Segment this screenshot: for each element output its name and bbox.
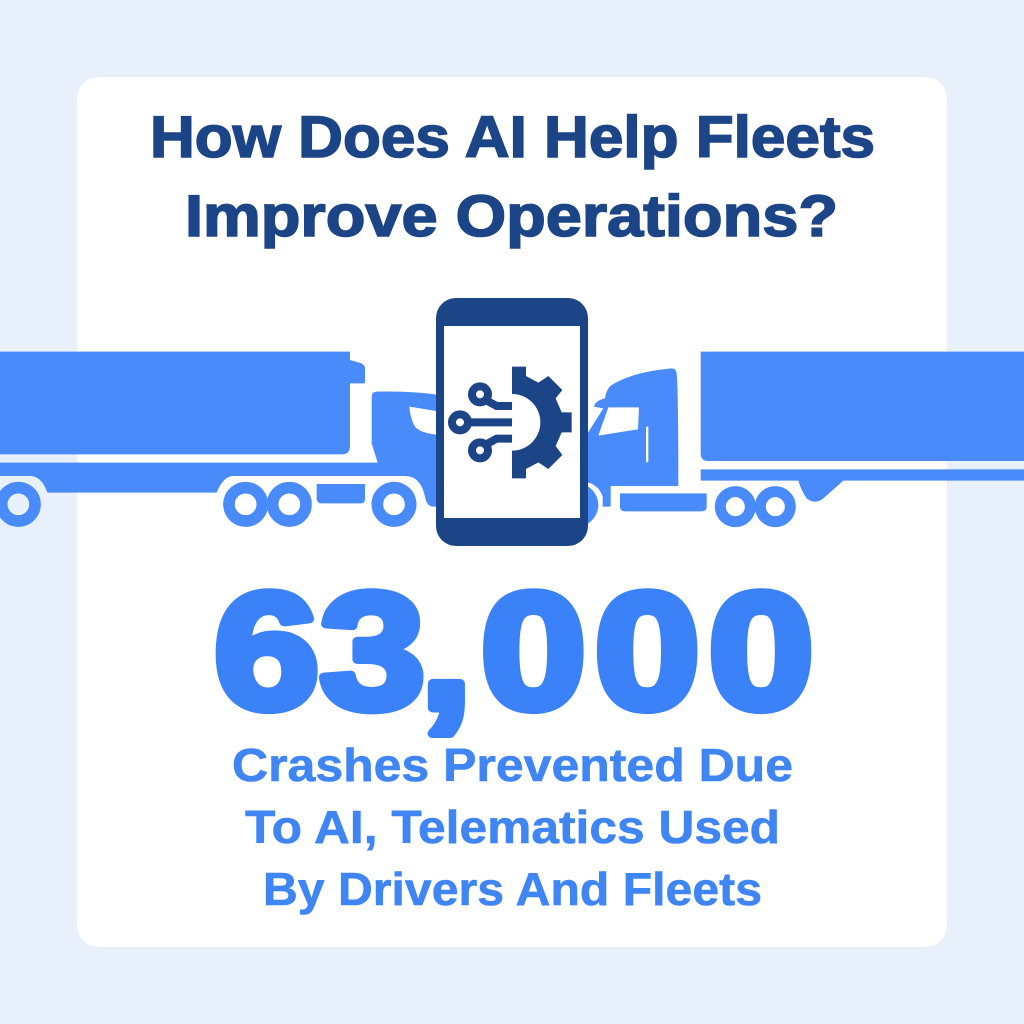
- caption: [232, 739, 793, 915]
- title: Improve Operations?: [185, 184, 838, 249]
- icon: AI gear with circuits: [452, 367, 572, 478]
- caption: Crashes Prevented Due: [232, 739, 793, 791]
- caption: By Drivers And Fleets: [263, 863, 762, 915]
- icon: left truck: [0, 352, 440, 521]
- panel: white card: [77, 77, 947, 947]
- icon: smartphone: [436, 298, 588, 546]
- big number: 63,000: [214, 559, 814, 743]
- caption: To AI, Telematics Used: [245, 801, 780, 853]
- icon: right truck: [555, 352, 1024, 528]
- title: [150, 105, 875, 249]
- title: How Does AI Help Fleets: [150, 105, 875, 170]
